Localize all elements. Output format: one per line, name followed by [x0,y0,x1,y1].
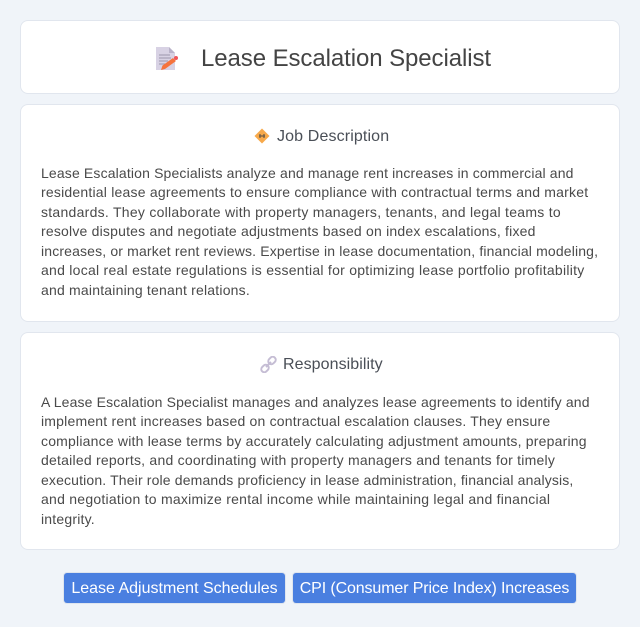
text block: responsibility: A Lease Escalation Specialist manages and analyzes lease agreements to identify and [41,394,590,410]
text block: job description: Lease Escalation Specialists analyze and manage rent increases in commercial and [41,165,574,181]
tag: CPI increases [293,573,576,603]
heading: job description: Job Description [277,128,389,145]
text block: responsibility: execution. Their role demands proficiency in lease administration, financial analysis, [41,472,573,488]
panel: title card [20,20,620,94]
panel: job description [20,104,620,322]
text block: responsibility: detailed reports, and coordinating with property managers and tenants for timely [41,452,555,468]
text block: job description: and maintaining tenant relations. [41,282,250,298]
text block: responsibility: implement rent increases based on contractual escalation clauses. They ensure [41,413,550,429]
text block: responsibility: and negotiation to maximize rental income while maintaining legal and financial [41,491,550,507]
icon: document with pencil [156,47,178,70]
icon: diamond sign [254,128,270,144]
text block: job description: residential lease agreements to ensure compliance with contractual terms and market [41,184,588,200]
text block: job description: resolve disputes and negotiate adjustments based on index escalations, fixed [41,223,536,239]
text block: job description: standards. They collaborate with property managers, tenants, and legal teams to [41,204,561,220]
text block: responsibility [41,394,590,527]
text block: job description: and local real estate regulations is essential for optimizing lease portfolio profitability [41,262,584,278]
title: Lease Escalation Specialist [201,45,491,72]
tag: lease adjustment schedules: Lease Adjustment Schedules [71,580,278,597]
panel: responsibility [20,332,620,550]
heading: responsibility: Responsibility [283,356,383,373]
tag: CPI increases: CPI (Consumer Price Index) Increases [300,580,569,597]
text block: responsibility: integrity. [41,511,95,527]
icon: chain link [260,356,277,373]
tag: lease adjustment schedules [64,573,285,603]
text block: job description [41,165,598,298]
text block: responsibility: compliance with lease terms by accurately calculating adjustment amounts, preparing [41,433,587,449]
text block: job description: increases, or market rent reviews. Expertise in lease documentation, financial modeling, [41,243,598,259]
